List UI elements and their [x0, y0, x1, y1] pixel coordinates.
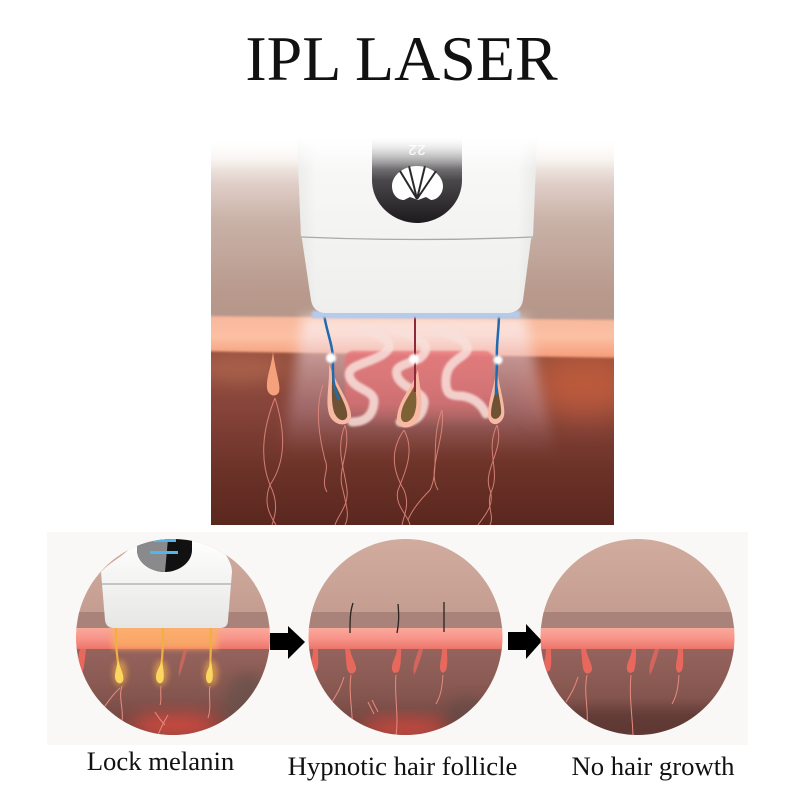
dermis orange glow right: [530, 353, 640, 417]
background: air above skin: [211, 155, 614, 322]
circle 2 red glow: [359, 719, 451, 739]
title: IPL LASER: [245, 23, 558, 94]
circle 3 upper band: [540, 612, 735, 630]
sparkles: [326, 353, 502, 364]
glowing halo: [113, 660, 218, 686]
circle 2 skin band: [308, 628, 503, 649]
device body: [298, 162, 536, 313]
heat waves: [349, 330, 486, 422]
circle 3 follicles: [544, 649, 683, 675]
mini blue indicators: [153, 539, 176, 542]
blue glow under device: [312, 311, 520, 318]
circle 1 air: [76, 539, 270, 615]
follicle nerves: [264, 385, 499, 525]
circle 3 skin band: [540, 628, 735, 649]
label: no hair growth: No hair growth: [571, 751, 735, 781]
shell logo: [392, 166, 443, 200]
circle 2 follicles: [311, 649, 447, 675]
panel: process strip background: [47, 532, 748, 745]
orange light: [112, 624, 218, 649]
circle 1 dermis: [76, 647, 270, 735]
label: hypnotic hair follicle: Hypnotic hair follicle: [288, 751, 517, 781]
circle 1 roots: [102, 686, 210, 735]
circle 2 hairs: [350, 602, 444, 633]
arrow 1: [270, 626, 305, 659]
circle 1 upper band: [76, 612, 270, 630]
faded follicle: [179, 649, 187, 677]
circle 2 dermis: [308, 647, 503, 735]
label: lock melanin: Lock melanin: [87, 746, 234, 776]
digital display: 22: [408, 140, 426, 157]
circle 3 roots: [566, 675, 679, 735]
circle 3 lower shade: [530, 708, 745, 738]
follicle 3: [488, 314, 504, 424]
circle 1 skin band: [76, 628, 270, 649]
circle 2 roots: [332, 675, 443, 735]
dermis glow left: [195, 354, 285, 382]
circle 1 lower-right shadow: [223, 670, 263, 720]
arrow 2: [508, 624, 542, 659]
circle 2: hypnotic hair follicle: [308, 539, 503, 739]
mini device: [101, 539, 232, 628]
seam: [301, 237, 533, 240]
mini seam: [102, 583, 231, 585]
left follicle: [78, 649, 86, 674]
background: dermis: [200, 345, 624, 525]
top white fade: [297, 137, 537, 168]
glowing hairs: [116, 628, 211, 668]
display screen: [372, 137, 462, 223]
circle 2 air: [308, 539, 503, 615]
circle 3: no hair growth: [530, 539, 745, 738]
glowing follicles: [115, 660, 213, 683]
circle 1: lock melanin: [76, 539, 272, 738]
mini device body: [101, 539, 232, 628]
circle 1 red glow: [129, 714, 221, 738]
follicle 1: [324, 314, 351, 424]
circle 3 dermis: [540, 647, 735, 735]
panel: main device illustration: [211, 143, 614, 525]
circle 2 upper band: [308, 612, 503, 630]
follicle 2: [397, 314, 422, 427]
skin band: [190, 316, 634, 358]
circle 2 shadow: [445, 697, 495, 733]
left pale follicle: [267, 352, 279, 395]
handheld device: [297, 137, 537, 313]
circle 3 air: [540, 539, 735, 615]
heated pink zone: [345, 351, 493, 427]
mini screen: [137, 539, 192, 572]
light beam: [282, 317, 556, 455]
